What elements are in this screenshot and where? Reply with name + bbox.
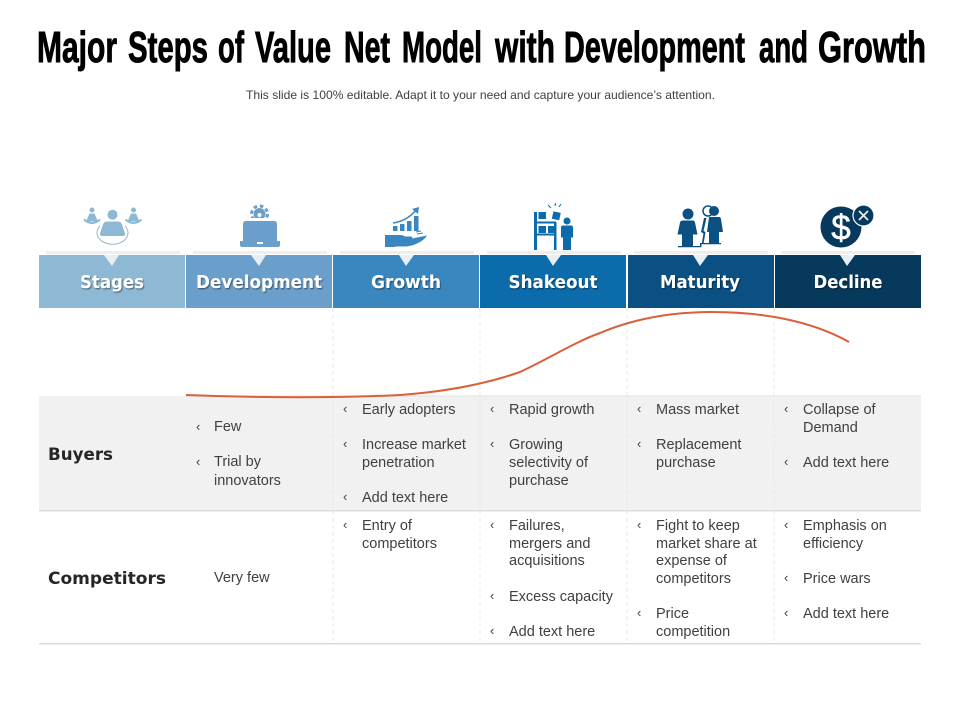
text: competitors shakeout: mergers and <box>509 536 590 552</box>
text: buyers maturity: Replacement <box>656 437 741 453</box>
title: of <box>218 23 244 72</box>
text: buyers maturity: ‹ <box>637 436 641 451</box>
icon: growth chart on hand <box>385 207 427 247</box>
text: buyers maturity: ‹ <box>637 401 641 416</box>
text: buyers decline: Collapse of <box>803 402 877 418</box>
text: competitors shakeout: Excess capacity <box>509 589 614 605</box>
title: and <box>759 23 808 72</box>
text: competitors maturity: expense of <box>656 553 728 569</box>
header: Maturity: Maturity <box>660 272 740 293</box>
icon: laptop with gear <box>240 206 280 247</box>
text: buyers development: Few <box>214 419 242 435</box>
text: buyers growth: Add text here <box>362 490 448 506</box>
text: competitors maturity: ‹ <box>637 605 641 620</box>
text: competitors maturity: market share at <box>656 536 757 552</box>
text: competitors growth: competitors <box>362 536 437 552</box>
text: buyers decline: ‹ <box>784 454 788 469</box>
title: with <box>494 23 555 72</box>
text: competitors decline: Add text here <box>803 606 889 622</box>
icon: people group <box>84 208 142 244</box>
title: Development <box>564 23 745 72</box>
text: buyers shakeout: ‹ <box>490 401 494 416</box>
text: competitors maturity: Fight to keep <box>656 518 740 534</box>
text: buyers development <box>196 419 281 489</box>
text: competitors shakeout: ‹ <box>490 517 494 532</box>
text: buyers growth: ‹ <box>343 489 347 504</box>
text: buyers development: innovators <box>214 473 281 489</box>
text: competitors maturity: Price <box>656 606 689 622</box>
text: competitors maturity: ‹ <box>637 517 641 532</box>
text: competitors shakeout: ‹ <box>490 588 494 603</box>
row label: Competitors: Competitors <box>48 569 166 589</box>
text: buyers maturity: purchase <box>656 455 716 471</box>
header: Growth <box>333 251 479 308</box>
text: buyers decline <box>784 401 889 471</box>
icon: shelf with person <box>534 203 573 250</box>
text: buyers maturity <box>637 401 741 471</box>
header: Decline: Decline <box>814 272 882 293</box>
title: Major <box>37 23 117 72</box>
column dividers <box>333 308 774 643</box>
text: competitors decline: Price wars <box>803 571 871 587</box>
text: buyers development: Trial by <box>214 454 262 470</box>
icon: dollar with cross: $ <box>831 208 851 248</box>
text: competitors growth: ‹ <box>343 517 347 532</box>
text: competitors maturity: competition <box>656 624 730 640</box>
text: buyers decline: ‹ <box>784 401 788 416</box>
text: buyers shakeout: ‹ <box>490 436 494 451</box>
text: competitors maturity <box>637 517 757 640</box>
text: competitors decline: Emphasis on <box>803 518 887 534</box>
text: competitors decline <box>784 517 889 622</box>
text: competitors growth: Entry of <box>362 518 413 534</box>
text: buyers development: ‹ <box>196 454 200 469</box>
text: competitors shakeout: ‹ <box>490 623 494 638</box>
text: buyers decline: Demand <box>803 420 858 436</box>
title: Steps <box>128 23 208 72</box>
header: Growth: Growth <box>371 272 441 293</box>
text: buyers development: ‹ <box>196 419 200 434</box>
icon: dollar with cross <box>820 205 874 248</box>
header: Maturity <box>628 251 774 308</box>
row label: Buyers: Buyers <box>48 445 113 465</box>
text: competitors decline: ‹ <box>784 570 788 585</box>
panel: buyers row background <box>39 396 921 512</box>
text: buyers decline: Add text here <box>803 455 889 471</box>
header band <box>39 251 921 308</box>
text: competitors shakeout: acquisitions <box>509 553 585 569</box>
text: competitors decline: efficiency <box>803 536 864 552</box>
header: Development <box>186 251 332 308</box>
text: buyers shakeout: purchase <box>509 473 569 489</box>
text: competitors growth <box>343 517 437 552</box>
panel: competitors row rule <box>39 643 921 644</box>
header: Development: Development <box>196 272 322 293</box>
title: Model <box>402 23 482 72</box>
text: competitors maturity: competitors <box>656 571 731 587</box>
text: buyers growth: ‹ <box>343 401 347 416</box>
text: competitors shakeout <box>490 517 614 640</box>
icon: two people on step <box>678 206 723 247</box>
subtitle: This slide is 100% editable. Adapt it to your need and capture your audience’s attention. <box>246 88 715 102</box>
text: buyers growth <box>343 401 466 506</box>
header: Stages: Stages <box>80 272 144 293</box>
text: competitors decline: ‹ <box>784 517 788 532</box>
header: Decline <box>775 251 921 308</box>
title: Net <box>344 23 390 72</box>
text: buyers growth: ‹ <box>343 436 347 451</box>
header: Shakeout: Shakeout <box>508 272 598 293</box>
text: buyers shakeout <box>490 401 594 489</box>
title: Value <box>255 23 331 72</box>
text: competitors decline: ‹ <box>784 605 788 620</box>
text: buyers growth: Increase market <box>362 437 466 453</box>
title <box>37 23 926 72</box>
text: buyers shakeout: Growing <box>509 437 563 453</box>
text: buyers maturity: Mass market <box>656 402 739 418</box>
text: competitors development: Very few <box>214 570 270 586</box>
header: Stages <box>39 251 185 308</box>
growth curve <box>186 312 849 397</box>
text: buyers shakeout: selectivity of <box>509 455 589 471</box>
text: competitors shakeout: Add text here <box>509 624 595 640</box>
text: competitors shakeout: Failures, <box>509 518 565 534</box>
text: buyers shakeout: Rapid growth <box>509 402 594 418</box>
text: buyers growth: penetration <box>362 455 435 471</box>
header: Shakeout <box>480 251 626 308</box>
text: buyers growth: Early adopters <box>362 402 456 418</box>
